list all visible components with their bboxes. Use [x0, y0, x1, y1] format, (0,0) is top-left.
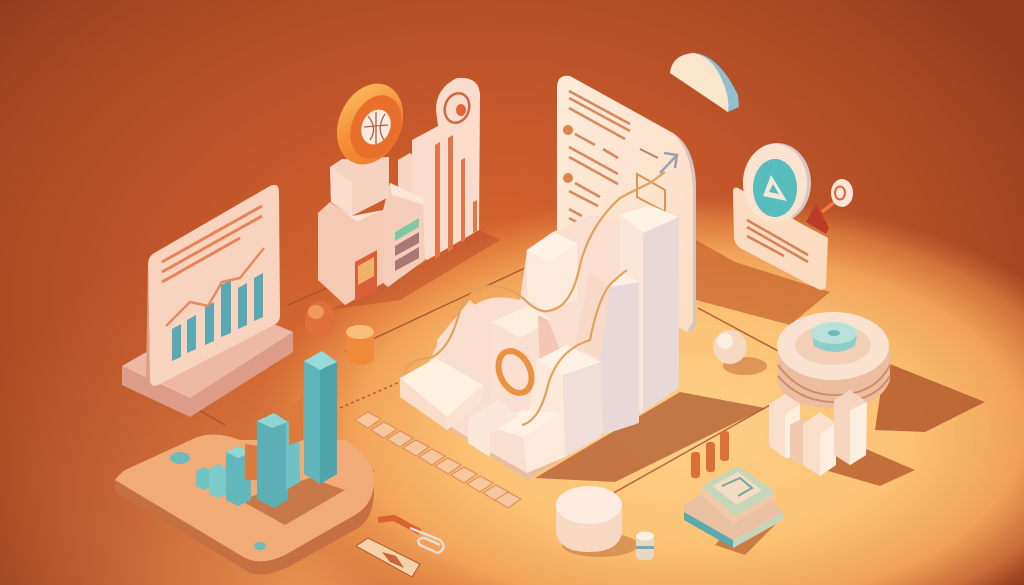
short dash [640, 149, 658, 158]
small can [636, 532, 654, 560]
row of keys [355, 412, 521, 508]
document arrow [637, 153, 677, 212]
small orange ring [492, 346, 538, 398]
center document [557, 76, 696, 332]
book stack [684, 466, 783, 548]
panel board [148, 185, 280, 386]
small back block [398, 153, 416, 200]
target icon [441, 90, 473, 126]
panel bars [172, 273, 263, 361]
platform dots [170, 452, 190, 464]
platform [115, 470, 374, 574]
teal bars [196, 351, 337, 508]
left chart panel [122, 185, 293, 417]
tall right bar [620, 205, 678, 233]
floor shadows [330, 230, 985, 555]
step blocks [492, 305, 538, 395]
back block [527, 232, 577, 310]
base slab [395, 394, 565, 480]
target pin [831, 179, 853, 207]
red pin [806, 204, 829, 234]
badge [743, 144, 807, 222]
half dome [670, 53, 739, 112]
short right bar [537, 345, 601, 375]
platform shadow [240, 478, 345, 525]
cylinder stack [777, 312, 890, 408]
front short block [490, 410, 560, 437]
orange cylinder [346, 325, 374, 365]
orange ball [305, 301, 335, 339]
panel trend line [166, 248, 264, 326]
flowing mass [400, 215, 643, 473]
middle block [383, 183, 425, 287]
trend curves [404, 172, 665, 425]
middle right bar [600, 282, 639, 435]
document bullets [563, 125, 573, 135]
building striped bars [412, 78, 480, 260]
panel text lines [162, 206, 262, 282]
teal knob [812, 335, 857, 352]
small poster [355, 250, 377, 302]
left step [400, 358, 483, 417]
bottom-left platform chart [115, 351, 374, 574]
document text lines [569, 91, 630, 233]
top cube [330, 157, 389, 216]
orange ring icon [325, 73, 415, 175]
right card with teal badge [733, 143, 853, 290]
card [733, 188, 828, 290]
small white bars [769, 390, 867, 476]
left block [318, 202, 383, 305]
floor lines [195, 268, 780, 495]
orange pegs [691, 431, 729, 478]
white cylinder [556, 486, 638, 557]
tool and tag [356, 518, 444, 577]
center white bars [395, 172, 679, 480]
card lines [747, 220, 808, 262]
badge disc [743, 143, 811, 223]
center-top building [318, 73, 480, 305]
panel base [122, 330, 293, 417]
sphere [713, 330, 767, 375]
